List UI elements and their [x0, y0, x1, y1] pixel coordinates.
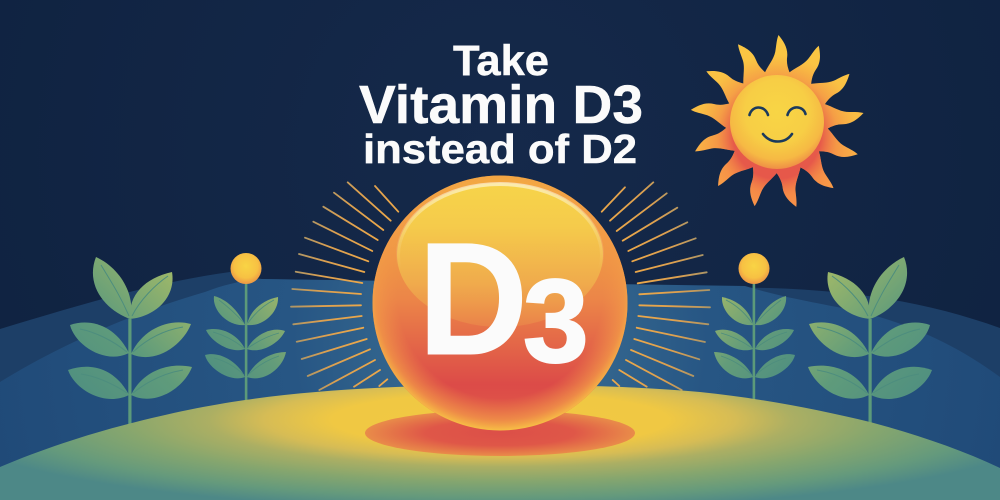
title [359, 37, 643, 172]
glowing ground hill [0, 385, 1000, 500]
capsule label: D3: 3 [523, 256, 589, 388]
capsule label: D3: D [418, 209, 528, 388]
light beams around capsule [291, 182, 710, 390]
sun disc [730, 75, 824, 169]
plant: small left with yellow bud [205, 253, 286, 401]
front hill [0, 279, 1000, 500]
plant: small right with yellow bud [714, 253, 795, 400]
sun rays [690, 35, 864, 207]
title: instead of D2 [363, 126, 637, 172]
plant: large right [808, 257, 932, 425]
back hill [0, 272, 1000, 500]
title: Take [453, 37, 549, 85]
sun face [750, 107, 806, 142]
icon: smiling sun [690, 35, 864, 207]
plant: large left [68, 257, 192, 425]
capsule shadow on ground [365, 410, 635, 456]
vitamin D3 capsule [372, 176, 628, 430]
capsule label: D3 [418, 209, 589, 388]
title: Vitamin D3 [359, 75, 643, 135]
